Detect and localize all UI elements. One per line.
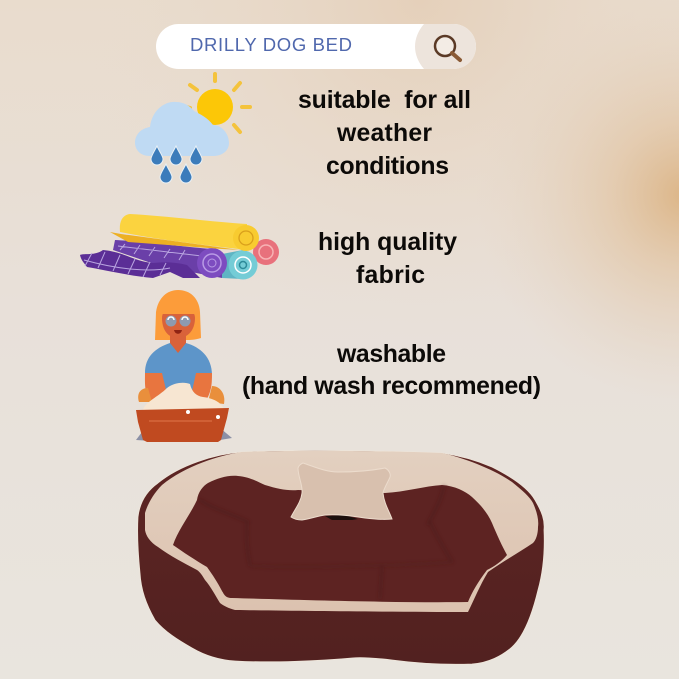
search bar xyxy=(156,24,476,69)
text: weather: suitable for all xyxy=(298,87,471,114)
cushion xyxy=(173,476,507,602)
icon: rolled towels xyxy=(80,214,279,280)
text: weather: weather xyxy=(336,120,432,147)
icon: person hand washing in a basin xyxy=(136,290,232,442)
text: fabric: high quality xyxy=(318,229,457,256)
text: fabric xyxy=(318,229,457,289)
text: washable: washable xyxy=(336,341,446,368)
icon: magnifying glass xyxy=(435,36,460,60)
text: weather: conditions xyxy=(326,153,449,180)
text: weather xyxy=(298,87,471,180)
bed outer wall xyxy=(138,450,544,664)
gap under pillow xyxy=(325,515,358,520)
bed inner lining xyxy=(145,451,538,612)
icon: sun, cloud and rain xyxy=(135,74,250,183)
pillow xyxy=(291,463,392,520)
text: washable: (hand wash recommened) xyxy=(242,373,541,400)
search bar label: DRILLY DOG BED xyxy=(190,34,352,55)
dog bed xyxy=(138,450,544,664)
text: fabric: fabric xyxy=(356,262,425,289)
cushion folds xyxy=(200,486,452,598)
text: washable xyxy=(242,341,541,400)
